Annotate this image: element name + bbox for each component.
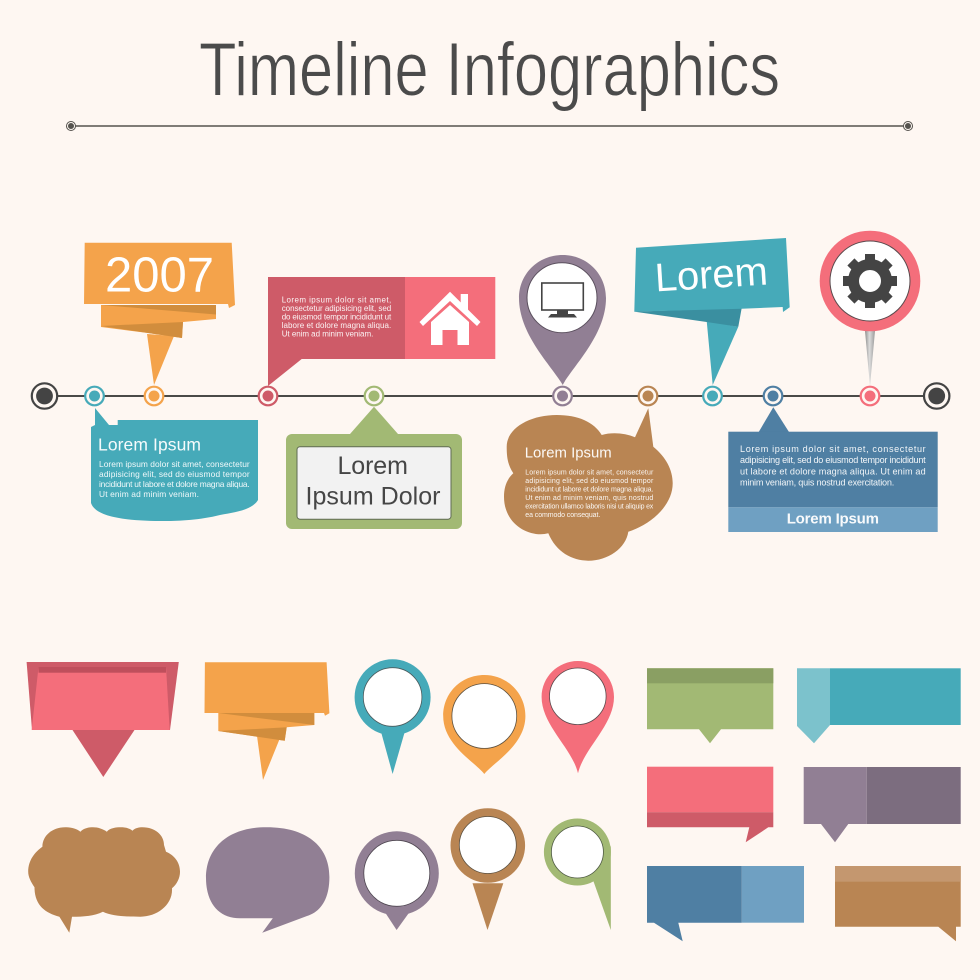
box text: Lorem ipsum dolor sit amet, consectetur [740, 444, 926, 454]
template: pink box [647, 767, 773, 842]
timeline node teal [85, 387, 104, 405]
callout text: consectetur adipisicing elit, sed [282, 304, 391, 313]
ribbon label: Lorem [654, 249, 769, 300]
template: green box [647, 668, 773, 743]
template: brown pin [450, 808, 525, 930]
title: Timeline Infographics [199, 28, 780, 112]
note text: incididunt ut labore et dolore magna aliqua. [99, 479, 250, 489]
box text: minim veniam, quis nostrud exercitation. [740, 478, 894, 488]
title divider [66, 122, 912, 130]
template: brown box [835, 866, 961, 941]
panel: green hanging sign [286, 407, 462, 529]
panel: blue text box [728, 407, 938, 532]
template: purple box [804, 767, 961, 842]
sign text [306, 452, 440, 510]
cloud text: Lorem ipsum dolor sit amet, consectetur [525, 470, 654, 476]
callout text: Ut enim ad minim veniam. [282, 330, 373, 338]
icon: gear [843, 254, 897, 308]
end marker [924, 383, 949, 409]
start marker [32, 383, 57, 409]
box text: adipisicing elit, sed do eiusmod tempor incididunt [740, 455, 926, 465]
template: orange folded ribbon [204, 662, 329, 780]
callout text: Lorem ipsum dolor sit amet, [282, 296, 391, 304]
note text: Ut enim ad minim veniam. [99, 489, 199, 499]
icon: house [420, 292, 480, 345]
panel: red pin with gear [820, 231, 920, 386]
timeline node pink [861, 387, 879, 405]
cloud heading: Lorem Ipsum [525, 446, 612, 462]
panel: orange 2007 ribbon callout [84, 243, 235, 385]
template: teal tab box [797, 668, 961, 743]
icon: monitor [542, 283, 583, 318]
timeline node purple [553, 387, 572, 405]
callout text [282, 296, 392, 338]
template: teal pin [355, 659, 431, 774]
template: pink pin [542, 661, 614, 773]
template: purple speech bubble [206, 827, 329, 933]
timeline node green [365, 387, 383, 405]
timeline node orange [145, 387, 163, 405]
timeline node blue [764, 387, 782, 405]
template: red trapezoid ribbon [27, 662, 179, 777]
sign text: Ipsum Dolor [306, 482, 440, 510]
timeline axis [32, 383, 949, 409]
timeline node brown [639, 387, 657, 405]
panel: red text callout with house icon [268, 277, 495, 386]
panel: teal Lorem ribbon callout [634, 238, 790, 385]
cloud text: ea commodo consequat. [525, 512, 600, 519]
cloud text: adipisicing elit, sed do eiusmod tempor [525, 478, 654, 485]
note text: Lorem ipsum dolor sit amet, consectetur [99, 459, 250, 469]
callout text: do eiusmod tempor incididunt ut [282, 312, 392, 322]
year label: 2007 [105, 248, 214, 302]
timeline node teal 2 [703, 387, 722, 405]
cloud text: Ut enim ad minim veniam, quis nostrud [525, 495, 653, 502]
template: green pin [544, 818, 611, 930]
panel: teal curled note [91, 408, 258, 521]
note text [99, 459, 250, 499]
cloud text: exercitation ullamco laboris nisi ut aliquip ex [525, 504, 654, 510]
cloud text: incididunt ut labore et dolore magna aliqua. [525, 486, 653, 494]
note heading: Lorem Ipsum [98, 434, 201, 454]
panel: purple map pin with monitor [519, 255, 606, 385]
note text: adipisicing elit, sed do eiusmod tempor [99, 469, 250, 479]
template: blue box [647, 866, 804, 941]
sign text: Lorem [337, 452, 408, 480]
cloud text [525, 470, 654, 519]
template: purple pin [355, 831, 439, 930]
box text [740, 444, 926, 488]
panel: brown cloud callout [504, 408, 673, 561]
template: brown cloud bubble [28, 827, 180, 933]
template: orange pin [443, 675, 525, 774]
box text: ut labore et dolore magna aliqua. Ut enim ad [740, 466, 926, 476]
box footer label: Lorem Ipsum [787, 510, 879, 527]
timeline node red [259, 387, 277, 405]
callout text: labore et dolore magna aliqua. [282, 321, 391, 330]
